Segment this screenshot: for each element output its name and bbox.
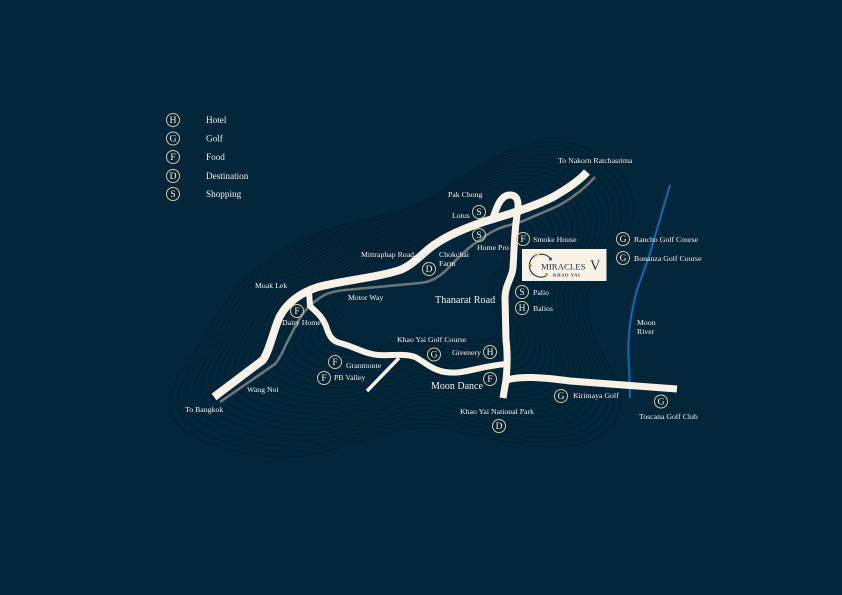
legend: Destination: D	[170, 172, 177, 182]
map icons: G	[558, 392, 565, 402]
map icons: F	[520, 235, 526, 245]
map labels: Khao Yai Golf Course	[397, 335, 467, 344]
legend	[166, 114, 249, 200]
map icons: G	[658, 398, 665, 408]
map labels: Wang Noi	[247, 385, 279, 394]
map labels	[185, 156, 702, 421]
map icons: F	[294, 307, 300, 317]
road: Motor Way	[220, 177, 595, 402]
map icons: F	[487, 375, 493, 385]
legend: Shopping: S	[170, 190, 176, 200]
map labels: Pak Chong	[448, 190, 483, 199]
map labels: Lotus	[452, 211, 470, 220]
map labels: Palio	[533, 288, 549, 297]
map labels: Thanarat Road	[435, 295, 495, 306]
contour lines background	[170, 142, 633, 457]
map labels: Muak Lek	[255, 281, 287, 290]
map labels: Balios	[533, 304, 553, 313]
logo: Miracles V Khao Yai: V	[590, 258, 601, 274]
logo: Miracles V Khao Yai: MIRACLES	[541, 262, 586, 272]
map icons: F	[332, 358, 338, 368]
logo: Miracles V Khao Yai	[522, 249, 606, 281]
map labels: To Bangkok	[185, 405, 223, 414]
map labels: PB Valley	[334, 373, 365, 382]
map icons: S	[476, 208, 482, 218]
map labels: To Nakorn Ratchasrima	[558, 156, 633, 165]
map icons: H	[519, 304, 526, 314]
road: Pak Chong loop and Thanarat Road	[493, 195, 518, 398]
map icons: F	[321, 374, 327, 384]
map icons: S	[519, 288, 525, 298]
road: Khao Yai Golf route	[309, 291, 507, 373]
map labels: Greenery	[452, 348, 481, 357]
map icons: H	[487, 348, 494, 358]
river: Moon River	[628, 185, 670, 398]
legend: Hotel label: Hotel	[206, 115, 227, 125]
legend: Golf: G	[170, 135, 177, 145]
map labels: Dairy Home	[282, 318, 321, 327]
road: Mittraphap Road	[214, 172, 587, 397]
map labels: Moon Dance	[431, 381, 483, 392]
map icons: D	[496, 422, 503, 432]
map labels: Rancho Golf Course	[634, 235, 699, 244]
map icons: G	[620, 235, 627, 245]
legend: Destination label: Destination	[206, 171, 249, 181]
map labels: Moon	[637, 318, 656, 327]
map labels: Chokchai	[439, 250, 470, 259]
map labels: Khao Yai National Park	[460, 407, 534, 416]
map labels: Motor Way	[348, 293, 383, 302]
legend: Food: F	[170, 153, 176, 163]
legend: Food label: Food	[206, 152, 225, 162]
legend: Shopping label: Shopping	[206, 189, 242, 199]
legend: Hotel: H	[170, 116, 177, 126]
road: branch to PB Valley	[367, 358, 399, 391]
road: east to Toscana	[507, 377, 677, 389]
map icons: G	[431, 351, 438, 361]
map labels: Farm	[439, 259, 455, 268]
logo: Miracles V Khao Yai: KHAO YAI	[553, 272, 580, 278]
map labels: Smoke House	[533, 235, 577, 244]
legend: Golf label: Golf	[206, 134, 224, 144]
map labels: Bonanza Golf Course	[634, 254, 702, 263]
map labels: Kirimaya Golf	[573, 391, 619, 400]
map icons: D	[426, 265, 433, 275]
map labels: Home Pro	[477, 243, 509, 252]
map labels: Mittraphap Road	[361, 250, 414, 259]
map icons: S	[476, 231, 482, 241]
map icons	[290, 206, 668, 432]
map labels: River	[637, 327, 655, 336]
map labels: Toscana Golf Club	[639, 412, 698, 421]
map labels: Granmonte	[346, 361, 382, 370]
map icons: G	[620, 254, 627, 264]
